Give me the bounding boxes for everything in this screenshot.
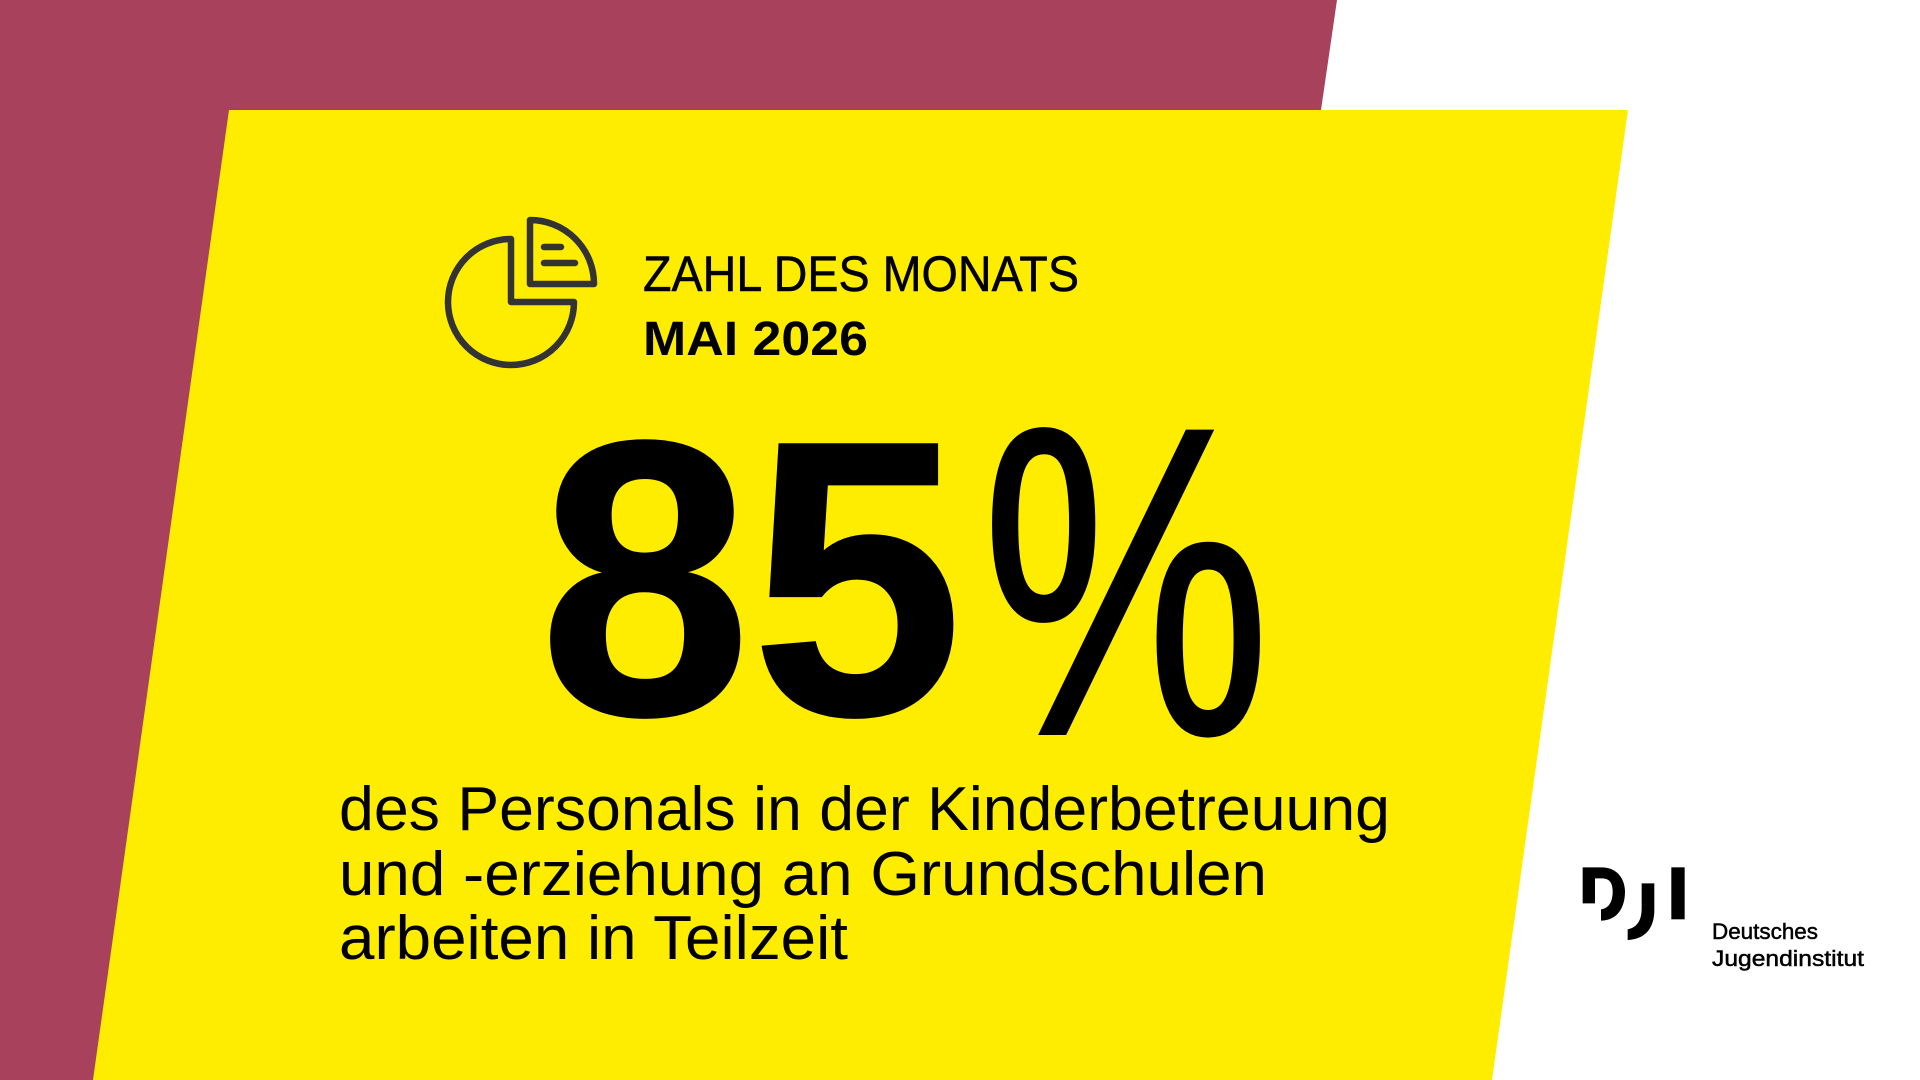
logo: DJI [1583,867,1864,971]
percent sign: % [982,336,1270,826]
description text: und -erziehung an Grundschulen [339,840,1267,909]
heading: Zahl des Monats: ZAHL DES MONATS [643,246,1079,302]
big number 85: 85 [539,360,963,798]
logo text: Deutsches [1712,919,1818,944]
description text [339,775,1390,973]
description text: arbeiten in Teilzeit [339,904,848,973]
logo: DJI: Jugendinstitut [1712,946,1864,971]
maroon background shape [0,0,1337,1080]
yellow panel [93,110,1628,1080]
heading: Mai 2026: MAI 2026 [643,313,868,366]
description text: des Personals in der Kinderbetreuung [339,775,1390,844]
icon: pie chart [448,220,594,365]
